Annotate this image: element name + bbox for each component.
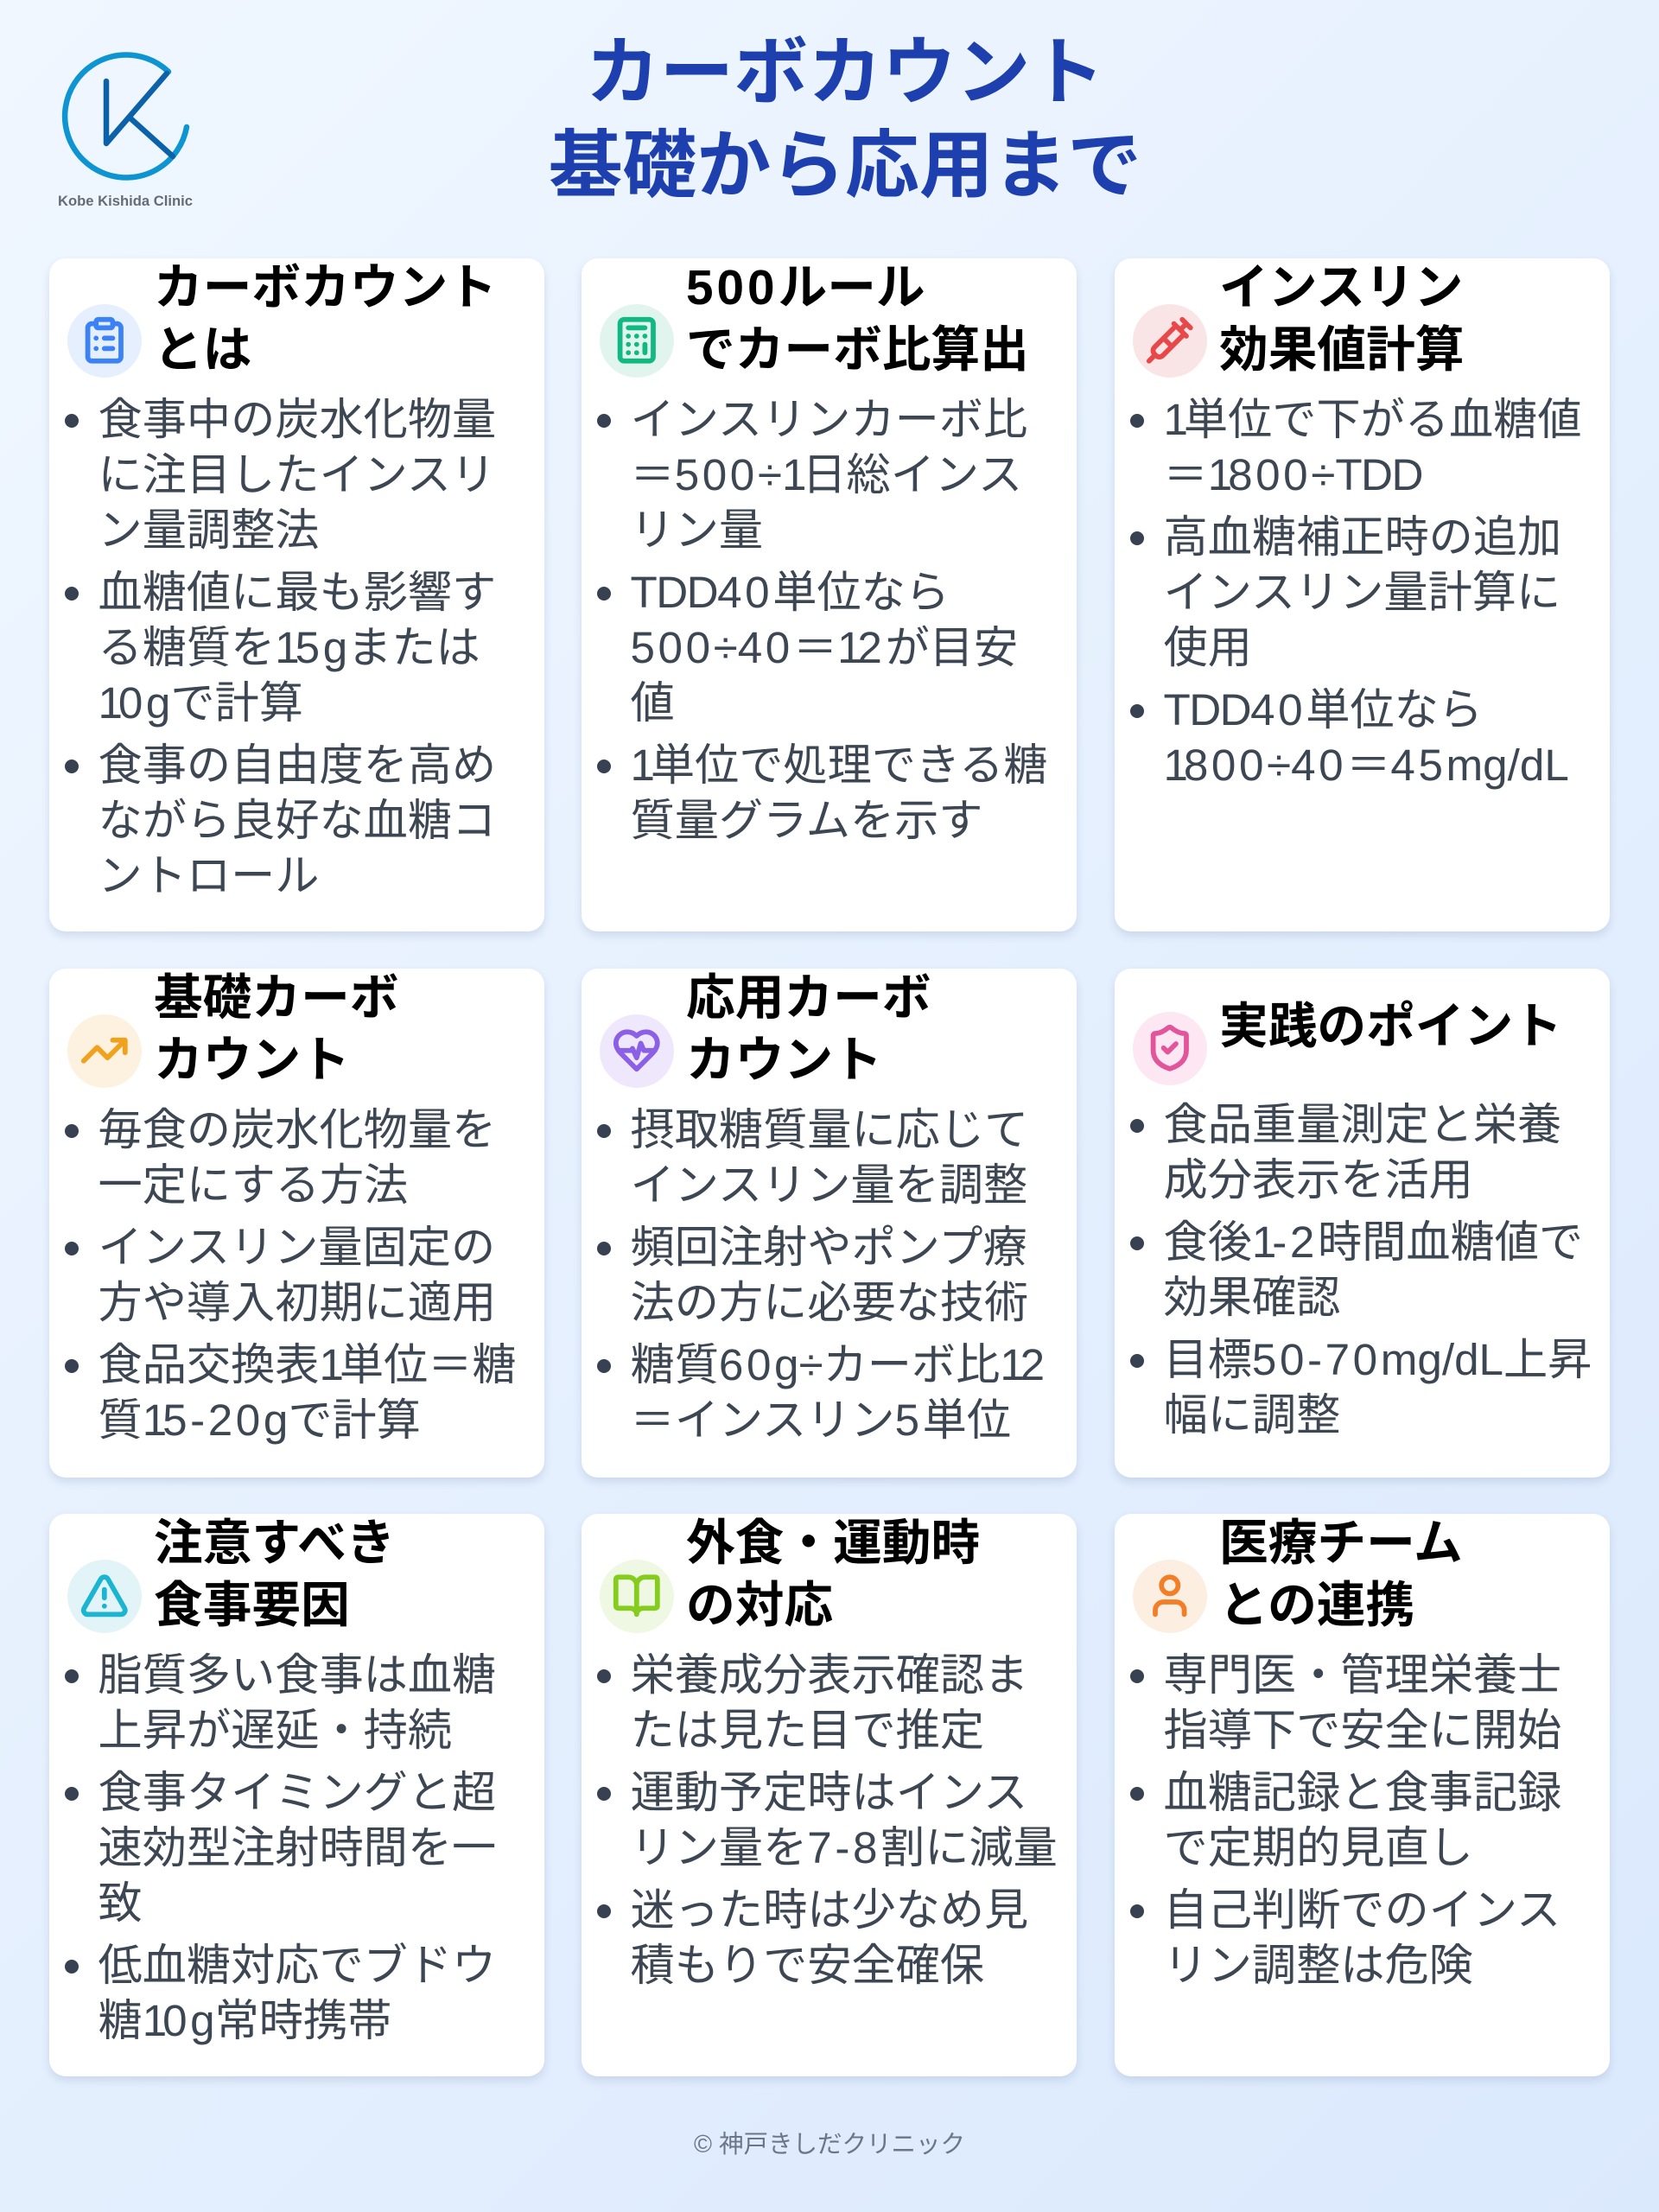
logo: Kobe Kishida Clinic [58, 52, 193, 209]
icon: heart pulse [600, 1014, 674, 1087]
heading: の対応 [686, 1578, 833, 1633]
bullet list: 成分表示を活用 [1163, 1154, 1473, 1205]
bullet list: 目標50-70mg/dL上昇 [1163, 1334, 1592, 1384]
icon: shield check [1132, 1011, 1206, 1085]
heading: 500ルール [686, 261, 925, 315]
bullet list: 上昇が遅延・持続 [99, 1706, 452, 1754]
bullet list: TDD40単位なら [1163, 684, 1483, 734]
bullet list: 使用 [1163, 622, 1252, 672]
heading: 応用カーボ [686, 971, 931, 1025]
bullet list: 食事の自由度を高め [99, 740, 496, 790]
bullet list: ながら良好な血糖コ [99, 795, 496, 845]
bullet list: 摂取糖質量に応じて [631, 1104, 1028, 1154]
bullet list: 効果確認 [1163, 1272, 1340, 1322]
bullet list [597, 1650, 1058, 1989]
logo ring [65, 54, 187, 177]
panel: 実践のポイント [1115, 969, 1610, 1478]
bullet list: 一定にする方法 [99, 1160, 408, 1210]
bullet list: たは見た目で推定 [631, 1706, 984, 1754]
panel: 応用カーボカウント [582, 969, 1077, 1478]
bullet list: 自己判断でのインス [1163, 1885, 1560, 1934]
title [549, 31, 1141, 207]
heading: インスリン [1219, 261, 1463, 315]
bullet list: リン量を7-8割に減量 [631, 1823, 1058, 1872]
bullet list: 1単位で処理できる糖 [631, 740, 1048, 790]
bullet list: 脂質多い食事は血糖 [99, 1650, 496, 1699]
icon: clipboard [67, 304, 142, 377]
heading [1219, 1516, 1463, 1633]
heading [686, 971, 931, 1087]
bullet list: で定期的見直し [1163, 1823, 1473, 1872]
bullet list: 1800÷40＝45mg/dL [1163, 740, 1569, 790]
bullet list: リン量 [631, 505, 763, 555]
bullet list: 値 [631, 677, 675, 728]
bullet list: 高血糖補正時の追加 [1163, 512, 1561, 562]
panel: 500ルールでカーボ比算出 [582, 258, 1077, 931]
heading: 食事要因 [154, 1578, 350, 1633]
heading: カウント [686, 1033, 882, 1087]
bullet list: 積もりで安全確保 [631, 1941, 984, 1989]
bullet list: 質15-20gで計算 [99, 1395, 421, 1445]
bullet list: ＝500÷1日総インス [631, 449, 1022, 499]
heading: 効果値計算 [1219, 323, 1464, 377]
bullet list [65, 1650, 496, 2044]
bullet list: リン調整は危険 [1163, 1941, 1473, 1989]
heading: 医療チーム [1219, 1516, 1463, 1571]
panel: 外食・運動時の対応 [582, 1514, 1077, 2076]
icon: calculator [600, 304, 674, 377]
bullet list: 血糖記録と食事記録 [1163, 1768, 1561, 1816]
heading [686, 261, 1029, 377]
bullet list: 食後1-2時間血糖値で [1163, 1217, 1583, 1267]
title: 基礎から応用まで [549, 124, 1141, 207]
heading: 外食・運動時 [686, 1516, 980, 1571]
bullet list: ン量調整法 [99, 505, 319, 555]
heading [154, 261, 497, 377]
bullet list: 指導下で安全に開始 [1163, 1706, 1561, 1754]
title: カーボカウント [586, 31, 1104, 114]
bullet list [597, 394, 1048, 845]
bullet list: 血糖値に最も影響す [99, 567, 496, 617]
bullet list [65, 394, 496, 900]
bullet list [1130, 1099, 1592, 1440]
bullet list [1130, 1650, 1561, 1989]
bullet list [1130, 394, 1582, 790]
bullet list: インスリン量を調整 [631, 1160, 1027, 1210]
panel: 基礎カーボカウント [49, 969, 544, 1478]
bullet list: インスリン量計算に [1163, 567, 1560, 617]
bullet list: 食品交換表1単位＝糖 [99, 1339, 517, 1389]
heading: とは [154, 323, 251, 377]
bullet list: 毎食の炭水化物量を [99, 1104, 496, 1154]
bullet list: 10gで計算 [99, 677, 303, 728]
heading: でカーボ比算出 [686, 323, 1029, 377]
heading [154, 1516, 395, 1633]
logo caption: Kobe Kishida Clinic [58, 193, 193, 209]
heading: カーボカウント [154, 261, 497, 315]
icon: warning triangle [67, 1559, 142, 1633]
icon: syringe [1132, 304, 1206, 377]
bullet list: 1単位で下がる血糖値 [1163, 394, 1582, 444]
icon: open book [600, 1559, 674, 1633]
heading: との連携 [1219, 1578, 1414, 1633]
bullet list: TDD40単位なら [631, 567, 950, 617]
bullet list: 迷った時は少なめ見 [631, 1885, 1028, 1934]
bullet list: 法の方に必要な技術 [631, 1277, 1028, 1327]
bullet list [597, 1104, 1048, 1445]
bullet list: ントロール [99, 850, 319, 900]
bullet list: る糖質を15gまたは [99, 622, 480, 672]
bullet list: 頻回注射やポンプ療 [631, 1222, 1027, 1272]
bullet list: 食事中の炭水化物量 [99, 394, 496, 444]
bullet list: 致 [99, 1878, 143, 1927]
bullet list: 幅に調整 [1163, 1389, 1340, 1440]
bullet list: 専門医・管理栄養士 [1163, 1650, 1561, 1699]
heading: 基礎カーボ [154, 971, 398, 1025]
bullet list: インスリン量固定の [99, 1222, 495, 1272]
icon: person [1132, 1559, 1206, 1633]
panel: 医療チームとの連携 [1115, 1514, 1610, 2076]
bullet list: ＝1800÷TDD [1163, 449, 1422, 499]
heading [686, 1516, 980, 1633]
bullet list: 栄養成分表示確認ま [631, 1650, 1028, 1699]
bullet list: 方や導入初期に適用 [99, 1277, 496, 1327]
heading: カウント [154, 1033, 350, 1087]
icon: trending up [67, 1014, 142, 1087]
footer: © 神戸きしだクリニック [694, 2131, 965, 2158]
bullet list: ＝インスリン5単位 [631, 1395, 1011, 1445]
heading: 注意すべき [154, 1516, 395, 1571]
bullet list: 糖質60g÷カーボ比12 [631, 1339, 1048, 1389]
bullet list: 運動予定時はインス [631, 1768, 1027, 1816]
panel: カーボカウントとは [49, 258, 544, 931]
heading [1219, 261, 1464, 377]
logo letter K [106, 73, 173, 156]
bullet list: 低血糖対応でブドウ [99, 1941, 496, 1989]
bullet list: 食品重量測定と栄養 [1163, 1099, 1561, 1149]
bullet list: 質量グラムを示す [631, 795, 982, 845]
bullet list: 食事タイミングと超 [99, 1768, 496, 1816]
bullet list: 500÷40＝12が目安 [631, 622, 1018, 672]
heading [154, 971, 398, 1087]
bullet list: インスリンカーボ比 [631, 394, 1027, 444]
bullet list [65, 1104, 517, 1445]
bullet list: に注目したインスリ [99, 449, 495, 499]
panel: インスリン効果値計算 [1115, 258, 1610, 931]
bullet list: 速効型注射時間を一 [99, 1823, 496, 1872]
bullet list: 糖10g常時携帯 [99, 1996, 391, 2044]
panel: 注意すべき食事要因 [49, 1514, 544, 2076]
heading: 実践のポイント [1219, 999, 1562, 1054]
